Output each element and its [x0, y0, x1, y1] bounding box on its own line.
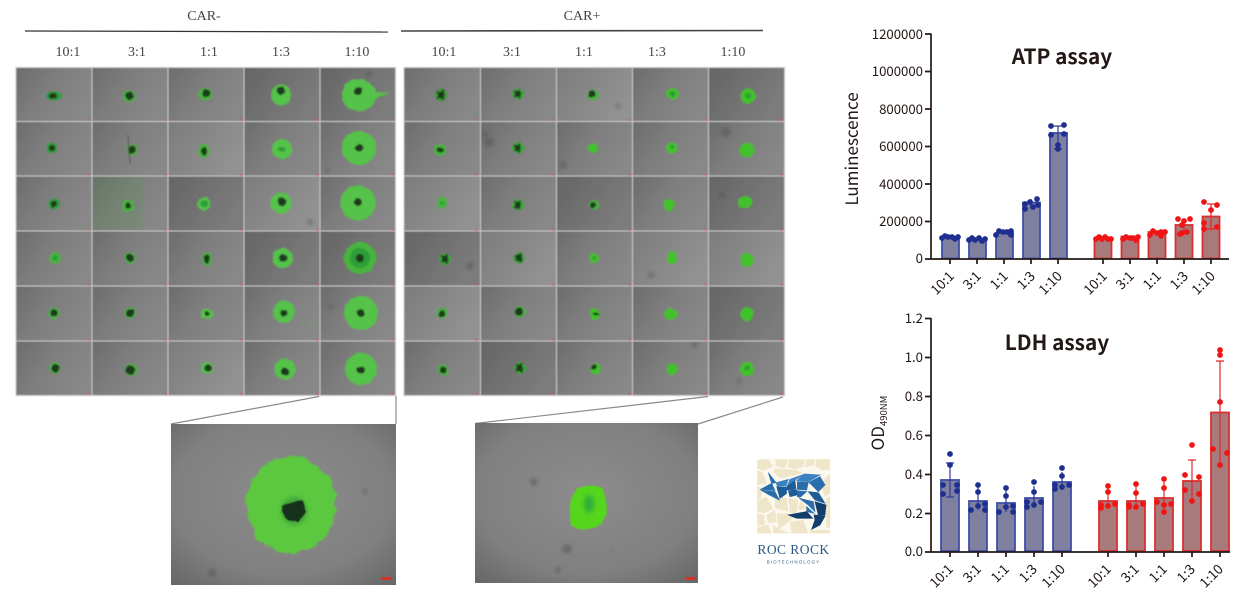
x axis with ticks and ratio labels: 3:1	[1110, 266, 1138, 293]
x axis with ticks and ratio labels: 1:10	[1036, 559, 1069, 592]
column labels: CAR+ ratios: 1:1	[575, 45, 593, 60]
connector lines: CAR+ zoom	[475, 396, 783, 424]
x axis with ticks and ratio labels: 1:10	[1033, 266, 1066, 299]
x axis with ticks and ratio labels: 1:1	[984, 266, 1012, 293]
x axis with ticks and ratio labels: 1:3	[1013, 559, 1041, 586]
x axis with ticks and ratio labels: 1:10	[1194, 559, 1227, 592]
x axis with ticks and ratio labels	[925, 259, 1229, 299]
logo wordmark: ROC ROCK	[757, 542, 830, 557]
chart title: LDH assay: LDH assay	[1005, 326, 1109, 356]
heading: CAR+: CAR+	[564, 9, 600, 24]
x axis with ticks and ratio labels: 3:1	[957, 559, 985, 586]
y axis with ticks: 0.0	[905, 541, 923, 560]
chart: LDH assay bar chart	[864, 308, 1230, 592]
y axis label: Luminescence: Luminescence	[838, 92, 863, 206]
row 5 CAR-	[16, 286, 395, 341]
y axis label: OD490NM: OD	[864, 426, 889, 450]
row 3 CAR-	[16, 176, 395, 231]
heading rule: CAR-	[25, 31, 388, 32]
row 3 CAR+	[404, 176, 784, 231]
column labels: CAR- ratios: 1:10	[345, 45, 369, 60]
y axis with ticks: 0.2	[905, 503, 923, 522]
y axis label: OD490NM: 490NM	[876, 396, 890, 426]
logo: Roc Rock Biotechnology	[757, 459, 831, 564]
column labels: CAR- ratios: 1:3	[272, 45, 290, 60]
row 2 CAR-	[16, 121, 395, 176]
y axis with ticks: 0	[916, 248, 923, 267]
y axis with ticks: 1000000	[872, 61, 923, 80]
x axis with ticks and ratio labels: 1:3	[1171, 559, 1199, 586]
panel: CAR+ microscopy grid	[404, 67, 784, 396]
y axis with ticks	[905, 308, 931, 560]
x axis with ticks and ratio labels: 3:1	[957, 266, 985, 293]
column labels: CAR- ratios: 1:1	[200, 45, 218, 60]
x axis with ticks and ratio labels: 1:1	[1137, 266, 1165, 293]
y axis with ticks: 0.4	[905, 464, 923, 483]
connector lines: CAR- zoom	[171, 396, 396, 424]
y axis with ticks: 1.0	[905, 347, 923, 366]
y axis with ticks	[872, 24, 931, 267]
icon: mosaic shark mark	[757, 459, 831, 534]
red bars: CAR+	[1093, 199, 1220, 258]
column labels: CAR- ratios	[56, 45, 369, 60]
column labels: CAR+ ratios: 1:3	[648, 45, 666, 60]
x axis with ticks and ratio labels: 3:1	[1115, 559, 1143, 586]
y axis with ticks: 0.8	[905, 386, 923, 405]
y axis with ticks: 800000	[879, 99, 923, 118]
y axis with ticks: 0.6	[905, 425, 923, 444]
x axis with ticks and ratio labels: 10:1	[1078, 266, 1111, 299]
blue bars: CAR-	[940, 451, 1072, 551]
row 6 CAR+	[404, 341, 784, 396]
x axis with ticks and ratio labels: 1:10	[1186, 266, 1219, 299]
heading rule: CAR+	[401, 30, 763, 32]
x axis with ticks and ratio labels: 10:1	[925, 266, 958, 299]
y axis with ticks: 1200000	[872, 24, 923, 43]
row 4 CAR+	[404, 231, 784, 286]
logo subtitle: BIOTECHNOLOGY	[767, 560, 820, 564]
row 1 CAR-	[16, 67, 395, 121]
x axis with ticks and ratio labels: 1:1	[985, 559, 1013, 586]
enlarged image: CAR- 1:10 spheroid	[171, 424, 396, 585]
y axis with ticks: 600000	[879, 136, 923, 155]
column labels: CAR- ratios: 10:1	[56, 45, 80, 60]
row 1 CAR+	[404, 67, 784, 121]
row 6 CAR-	[16, 341, 395, 396]
column labels: CAR+ ratios	[432, 45, 745, 60]
chart: ATP assay bar chart	[838, 24, 1229, 299]
y axis with ticks: 400000	[879, 174, 923, 193]
x axis with ticks and ratio labels: 1:3	[1011, 266, 1039, 293]
column labels: CAR+ ratios: 3:1	[503, 45, 521, 60]
x axis with ticks and ratio labels: 1:1	[1143, 559, 1171, 586]
column labels: CAR- ratios: 3:1	[128, 45, 146, 60]
red bars: CAR+	[1098, 347, 1230, 551]
x axis with ticks and ratio labels	[924, 552, 1230, 592]
y axis with ticks: 200000	[879, 211, 923, 230]
heading: CAR-: CAR-	[187, 9, 221, 24]
column labels: CAR+ ratios: 10:1	[432, 45, 456, 60]
x axis with ticks and ratio labels: 1:3	[1164, 266, 1192, 293]
chart title: ATP assay: ATP assay	[1011, 40, 1112, 70]
x axis with ticks and ratio labels: 10:1	[1082, 559, 1115, 592]
y axis with ticks: 1.2	[905, 308, 923, 327]
enlarged image: CAR+ 1:10 spheroid	[475, 423, 698, 583]
panel: CAR- microscopy grid	[16, 67, 396, 396]
row 5 CAR+	[404, 286, 784, 341]
column labels: CAR+ ratios: 1:10	[721, 45, 745, 60]
row 2 CAR+	[404, 121, 784, 176]
row 4 CAR-	[16, 231, 395, 286]
x axis with ticks and ratio labels: 10:1	[924, 559, 957, 592]
blue bars: CAR-	[939, 122, 1067, 258]
